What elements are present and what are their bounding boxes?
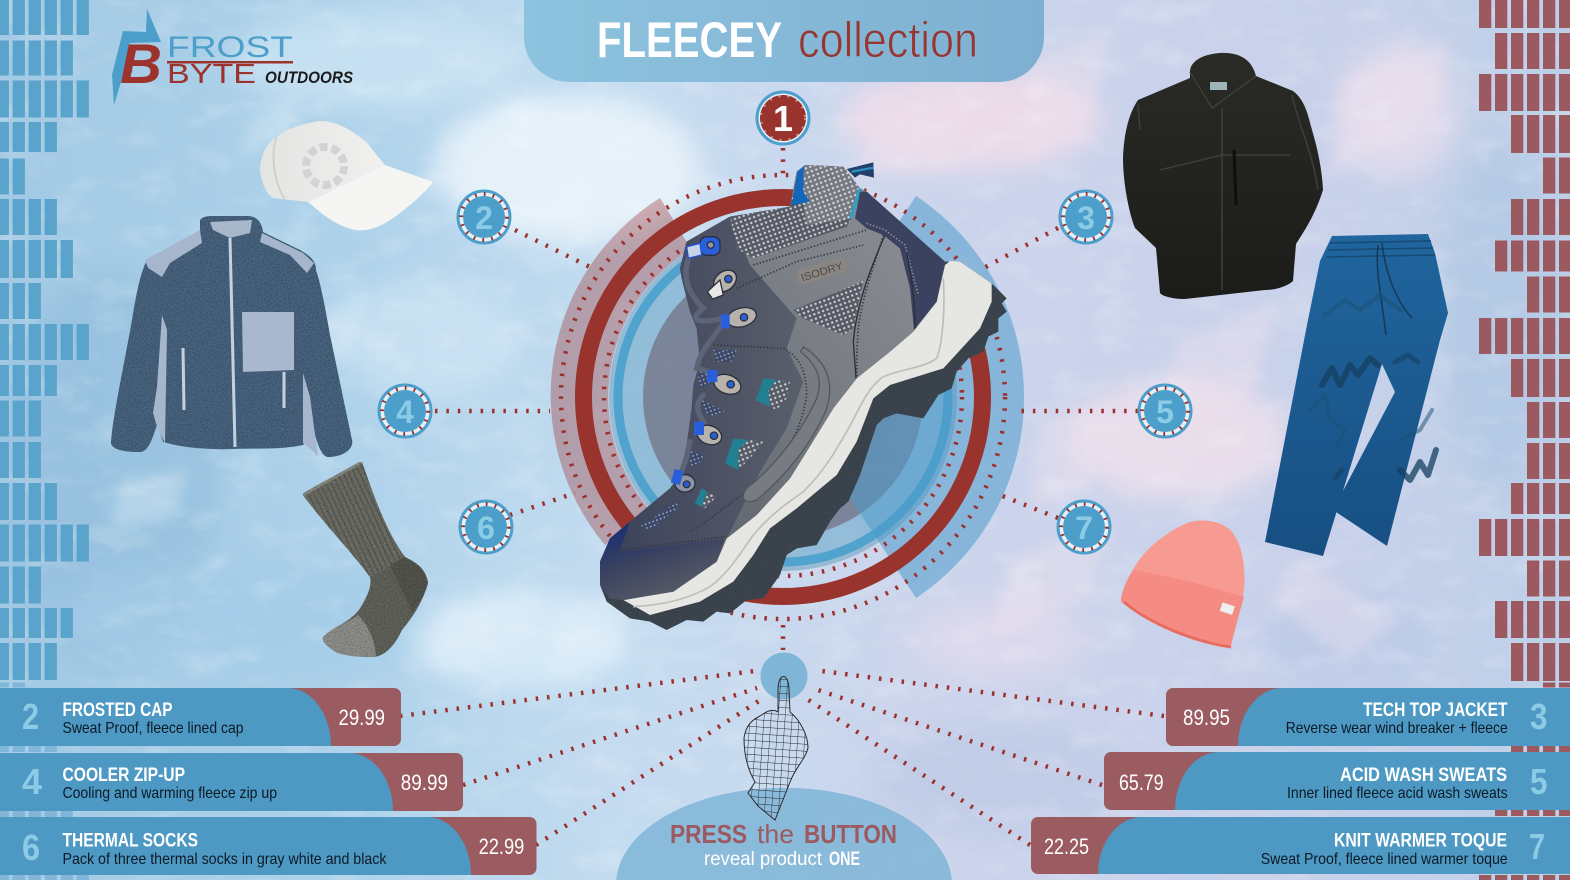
boot logo plate [795,256,849,286]
panel: item 5 acid wash sweats: 65.79 [1119,770,1164,795]
product 1: hiking boot [600,162,1007,630]
central target rings [551,175,1024,619]
pink sector [551,198,691,545]
boot seams [853,235,915,378]
badge 5: 5 [1156,394,1174,430]
panel: item 3 tech top jacket [1166,688,1570,746]
panel: item 6 thermal socks [0,817,536,875]
product 4: fleece zip-up jacket [111,216,352,457]
panel: item 4 cooler zip-up: 89.99 [401,770,448,795]
boot pull tab [847,162,874,178]
PRESS: PRESS [670,819,747,849]
press panel ellipse [616,788,952,880]
panel: item 3 tech top jacket: 89.95 [1183,705,1230,730]
product 7: pink knit toque [1121,520,1244,647]
panel: item 7 knit warmer toque: Sweat Proof, fleece lined warmer toque [1261,851,1508,868]
reveal product: reveal product [704,849,823,870]
boot logo plate: ISODRY [800,260,845,284]
badge 7 [1058,501,1110,553]
badge 4: 4 [396,394,414,430]
badge 7: 7 [1075,510,1093,546]
panel: item 7 knit warmer toque: 22.25 [1044,834,1089,859]
panel: item 5 acid wash sweats: Inner lined fleece acid wash sweats [1287,785,1508,802]
connector dotted lines [400,148,1164,845]
logo word OUTDOORS: OUTDOORS [265,68,354,87]
toque tag [1220,602,1235,615]
panel: item 6 thermal socks: Pack of three thermal socks in gray white and black [62,851,387,868]
boot laces [677,255,723,485]
panel: item 5 acid wash sweats: ACID WASH SWEATS [1340,765,1507,786]
right decorative bar column [1479,14,1570,878]
boot eye stay [620,217,803,552]
title banner [524,0,1044,82]
badge 2 [458,191,510,243]
boot collar lining [792,167,810,206]
blue sector [783,196,1024,598]
badge 1 [757,92,809,144]
panel: item 4 cooler zip-up: 4 [22,761,42,802]
title: collection: collection [798,12,978,68]
panel: item 3 tech top jacket: Reverse wear wind breaker + fleece [1286,720,1508,737]
panel: item 2 frosted cap: 2 [22,696,39,737]
product 5: acid wash sweatpants [1265,234,1448,556]
panel: item 2 frosted cap: Sweat Proof, fleece lined cap [62,720,244,737]
panel: item 7 knit warmer toque: 7 [1529,826,1545,867]
jacket collar and seams [1138,72,1318,290]
logo word FROST: FROST [167,31,293,64]
blue disc [609,223,957,571]
pants waistband [1326,241,1435,257]
fleece body [111,216,352,457]
product 3: black tech jacket [1123,53,1323,299]
ONE: ONE [829,849,860,870]
fleece collar lining [210,220,252,238]
jacket label [1210,82,1227,90]
panel: item 3 tech top jacket: TECH TOP JACKET [1363,700,1508,721]
panel: item 6 thermal socks: THERMAL SOCKS [62,831,198,852]
boot side mesh [793,281,863,335]
boot toe cap [600,522,725,600]
the: the [757,819,794,849]
panel: item 7 knit warmer toque: KNIT WARMER TOQUE [1334,831,1507,852]
boot midsole [623,261,992,615]
boot lace hooks [671,237,759,492]
panel: item 2 frosted cap: 29.99 [338,705,385,730]
panel: item 5 acid wash sweats: 5 [1530,761,1548,802]
logo letter B: B [120,32,162,95]
fleece zippers [183,238,284,447]
toque cuff [1121,570,1244,645]
icon: lightning bolt [112,9,161,105]
button circle [760,652,808,700]
panel: item 2 frosted cap: FROSTED CAP [62,700,173,721]
badge 3: 3 [1077,200,1095,236]
dotted rings [561,175,1005,619]
ice shards [850,30,1450,660]
left decorative bar column [0,18,89,878]
panel: item 7 knit warmer toque [1031,817,1570,874]
product 2: white cap [260,121,433,230]
boot side pill groove [743,347,830,502]
panel: item 4 cooler zip-up: COOLER ZIP-UP [62,765,185,786]
logo word BYTE: BYTE [167,58,256,89]
title: FLEECEY: FLEECEY [597,12,782,68]
pants acid wash marks [1310,295,1436,480]
boot upper [600,165,945,600]
panel: item 6 thermal socks: 22.99 [479,834,524,859]
boot teal patches [695,378,790,508]
fleece shoulder panels [145,230,318,457]
badge 6 [460,501,512,553]
panel: item 3 tech top jacket: 3 [1530,696,1548,737]
grey core disc [643,257,923,537]
badge 2: 2 [475,200,493,236]
BUTTON: BUTTON [804,819,897,849]
badge 6: 6 [477,510,495,546]
panel: item 6 thermal socks: 6 [22,827,40,868]
panel: item 4 cooler zip-up [0,753,463,811]
badge 1: 1 [773,98,793,139]
panel: item 2 frosted cap [0,688,401,746]
badge 3 [1060,191,1112,243]
product 6: thermal socks [303,462,428,657]
boot windows [640,350,737,530]
icon: wireframe pointing hand [744,676,808,820]
badge 5 [1139,385,1191,437]
panel: item 4 cooler zip-up: Cooling and warming fleece zip up [62,785,277,802]
boot heel panel [855,192,945,330]
fleece chest pocket [242,312,294,372]
boot stitching [622,230,883,550]
boot collar mesh [730,165,860,258]
pants drawstring [1377,243,1412,335]
badge 4 [379,385,431,437]
red ring [584,198,982,596]
panel: item 5 acid wash sweats [1104,752,1570,810]
call to action text [670,819,897,870]
logo: Frost Byte Outdoors [112,9,354,105]
boot outsole [600,165,1007,630]
